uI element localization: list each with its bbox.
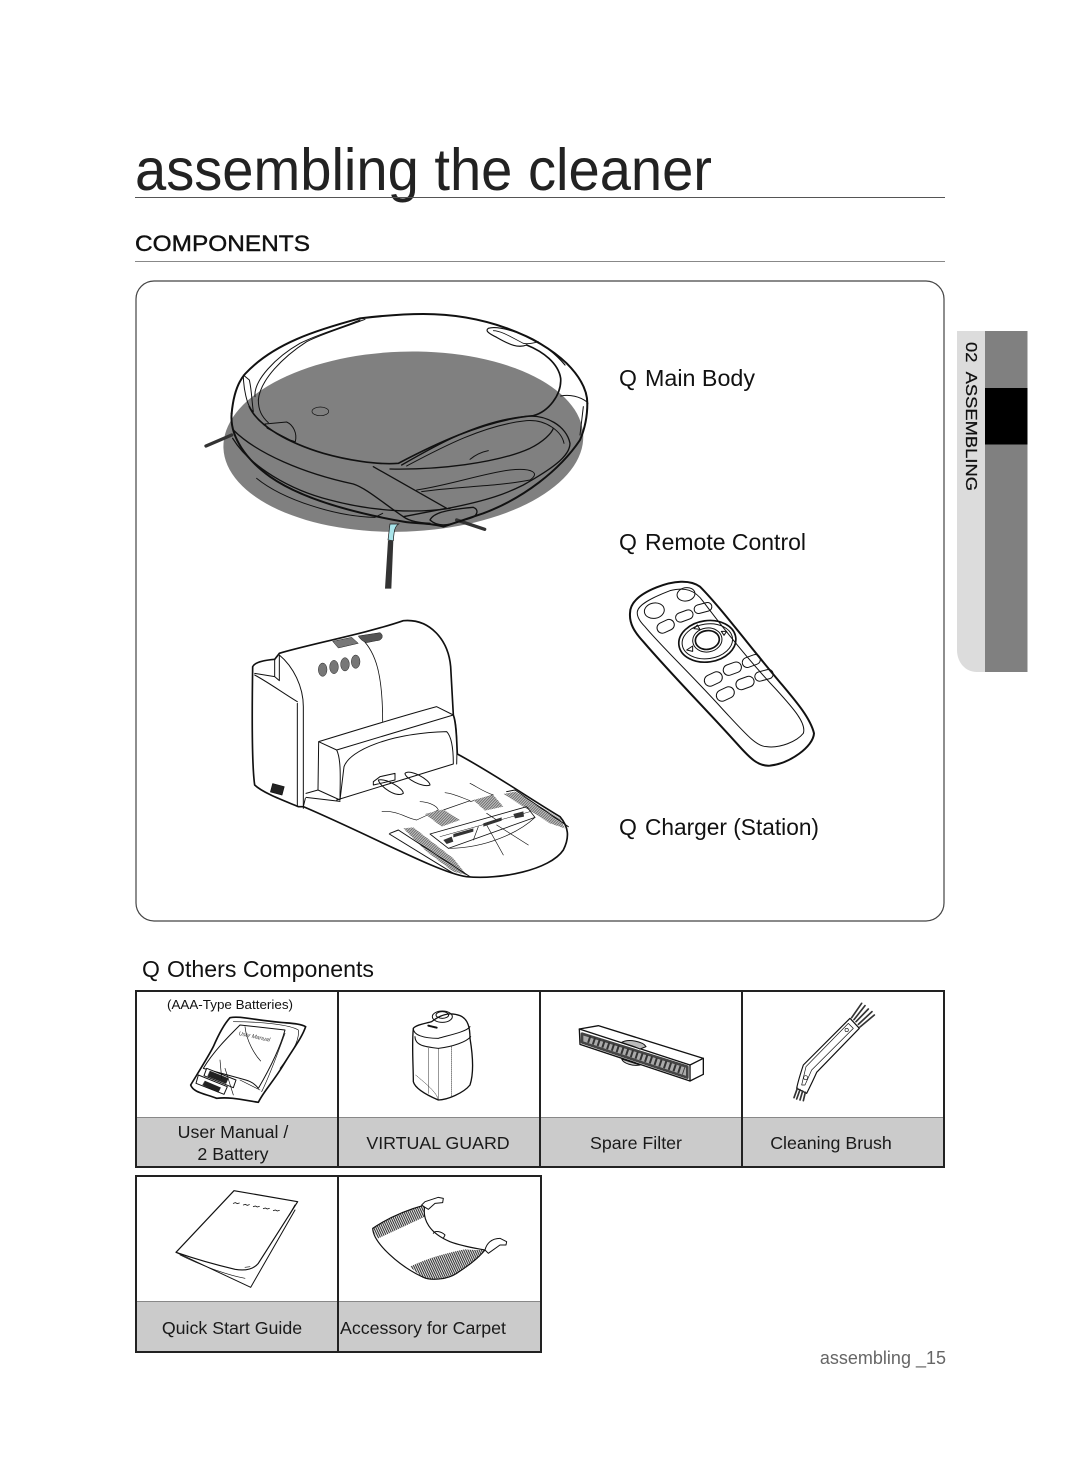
label: others components: Q	[142, 956, 160, 982]
label: accessory for carpet: Accessory for Carpet	[340, 1318, 506, 1338]
label: charger station: Charger (Station)	[645, 814, 819, 840]
label: main body: Q	[619, 365, 637, 391]
page number: assembling _15	[820, 1348, 946, 1369]
label: others components: Others Components	[167, 956, 374, 982]
label: charger station: Q	[619, 814, 637, 840]
label: user manual / battery: 2 Battery	[197, 1144, 269, 1164]
side tab: 02 assembling	[957, 331, 1028, 672]
icon: charger station	[252, 620, 568, 877]
label: quick start guide: Quick Start Guide	[162, 1318, 302, 1338]
caption: aaa batteries: (AAA-Type Batteries)	[167, 998, 293, 1012]
icon: spare filter	[579, 1026, 703, 1081]
panel: main components	[136, 281, 944, 921]
label: user manual / battery: User Manual /	[178, 1122, 288, 1142]
label: remote control: Q	[619, 529, 637, 555]
icon: remote control	[630, 582, 814, 766]
hatched floor pads	[403, 792, 565, 875]
title: assembling the cleaner	[135, 137, 712, 203]
label: user manual / battery	[178, 1122, 288, 1164]
icon: accessory for carpet	[373, 1197, 507, 1279]
label: remote control: Remote Control	[645, 529, 806, 555]
label: spare filter: Spare Filter	[590, 1133, 682, 1153]
icon: virtual guard	[413, 1011, 472, 1100]
icon: robot main body	[206, 314, 587, 589]
icon: quick start guide	[176, 1191, 298, 1287]
label: main body: Main Body	[645, 365, 756, 391]
table: accessories row two	[136, 1176, 541, 1352]
label: virtual guard: VIRTUAL GUARD	[366, 1133, 510, 1153]
label: cleaning brush: Cleaning Brush	[770, 1133, 892, 1153]
side tab: 02 assembling: 02 ASSEMBLING	[962, 342, 979, 491]
heading: components: COMPONENTS	[135, 231, 310, 256]
icon: user manual and batteries: User Manual	[238, 1031, 271, 1044]
icon: user manual and batteries	[191, 1017, 306, 1102]
icon: cleaning brush	[794, 1003, 874, 1101]
table: accessories row one	[136, 991, 944, 1167]
